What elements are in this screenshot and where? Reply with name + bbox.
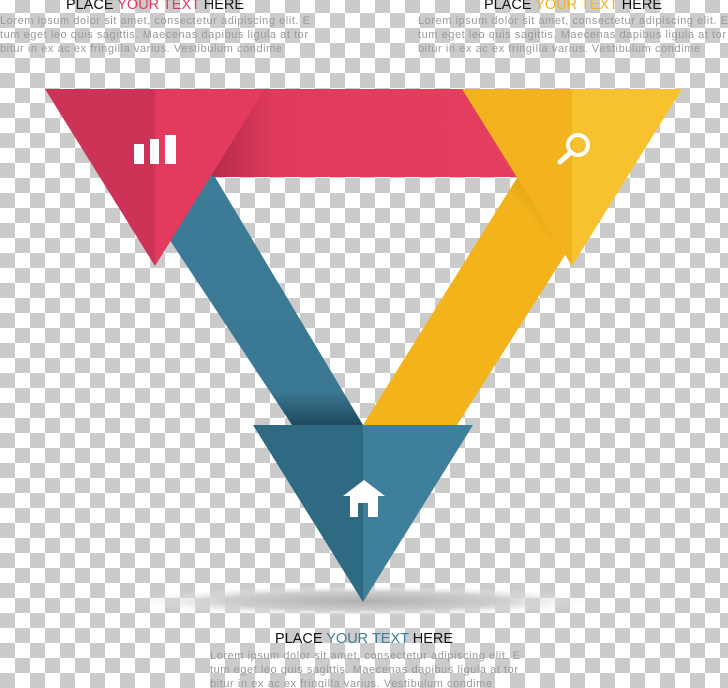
triangle: yellow with magnifier icon	[462, 89, 682, 266]
text block: bottom: tum eget leo quis sagittis. Maecenas dapibus ligula at tor	[210, 664, 518, 676]
triangle: red with bar chart icon	[45, 89, 265, 266]
band: blue	[150, 170, 363, 425]
icon: house	[343, 480, 385, 517]
text block: top right: Lorem ipsum dolor sit amet, consectetur adipiscing elit. E	[418, 15, 728, 27]
text block: top left: bitur in ex ac ex fringilla varius. Vestibulum condime	[0, 43, 282, 55]
text block: bottom	[210, 631, 520, 688]
text block: top right: tum eget leo quis sagittis. Maecenas dapibus ligula at tor	[418, 29, 726, 41]
shadow ellipse	[135, 586, 591, 616]
icon: bar chart	[134, 135, 176, 164]
text block: top right	[418, 0, 728, 55]
text block: top left	[0, 0, 310, 55]
text block: bottom: PLACE YOUR TEXT HERE	[275, 631, 453, 647]
band: yellow	[363, 165, 600, 425]
text block: top left: Lorem ipsum dolor sit amet, consectetur adipiscing elit. E	[0, 15, 310, 27]
text block: top left: tum eget leo quis sagittis. Maecenas dapibus ligula at tor	[0, 29, 308, 41]
icon: magnifier	[560, 135, 588, 162]
triangle: blue with house icon	[253, 425, 473, 602]
text block: bottom: Lorem ipsum dolor sit amet, consectetur adipiscing elit. E	[210, 650, 520, 662]
text block: top right: bitur in ex ac ex fringilla varius. Vestibulum condime	[418, 43, 700, 55]
band: red	[205, 89, 530, 177]
